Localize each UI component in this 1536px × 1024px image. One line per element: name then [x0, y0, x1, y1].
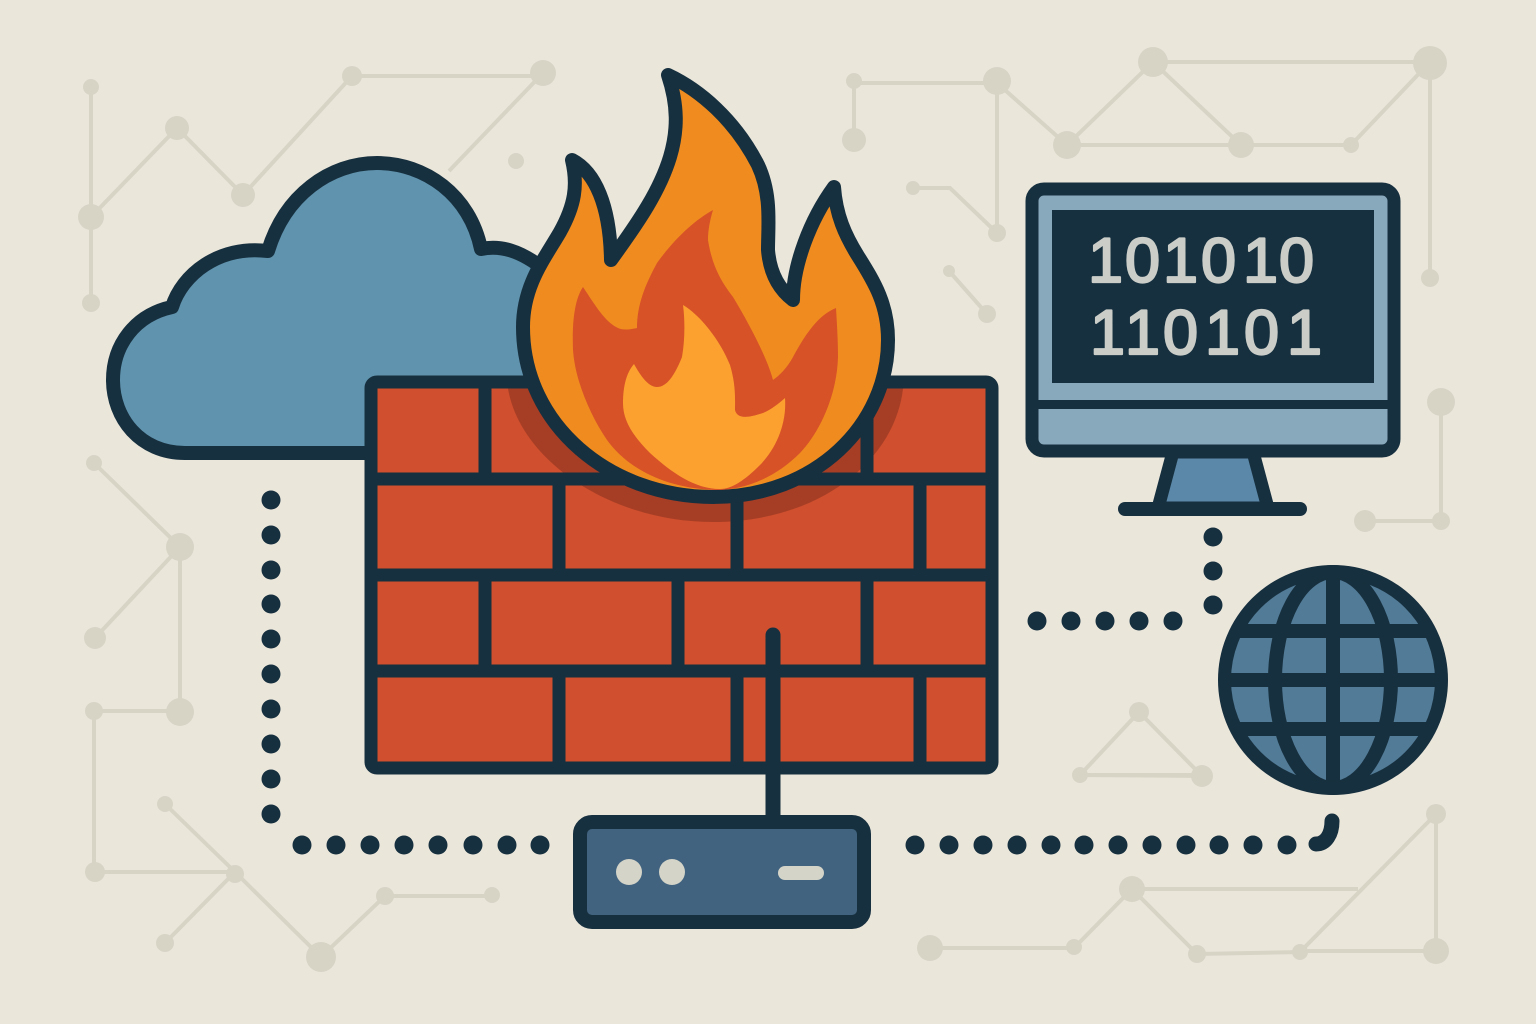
binary text — [1088, 226, 1322, 368]
icon: globe — [1224, 572, 1442, 788]
binary text: 101010 — [1088, 226, 1314, 296]
icon: computer monitor — [1032, 189, 1394, 509]
dotted connector: cloud to router — [262, 490, 550, 854]
icon: flame — [523, 75, 888, 497]
dotted connector: router to globe — [906, 821, 1332, 854]
monitor body — [1032, 189, 1394, 451]
icon: router — [580, 635, 864, 922]
brick mortar lines — [371, 382, 992, 768]
flame shadow on wall — [508, 388, 903, 522]
inner flame — [573, 210, 838, 490]
core flame — [623, 305, 785, 489]
binary text: 110101 — [1090, 298, 1322, 368]
monitor stand — [1158, 452, 1268, 508]
antenna — [766, 635, 780, 822]
icon: brick firewall wall — [371, 382, 992, 768]
dotted connector: wall to monitor — [1028, 528, 1222, 630]
icon: cloud — [113, 163, 560, 453]
